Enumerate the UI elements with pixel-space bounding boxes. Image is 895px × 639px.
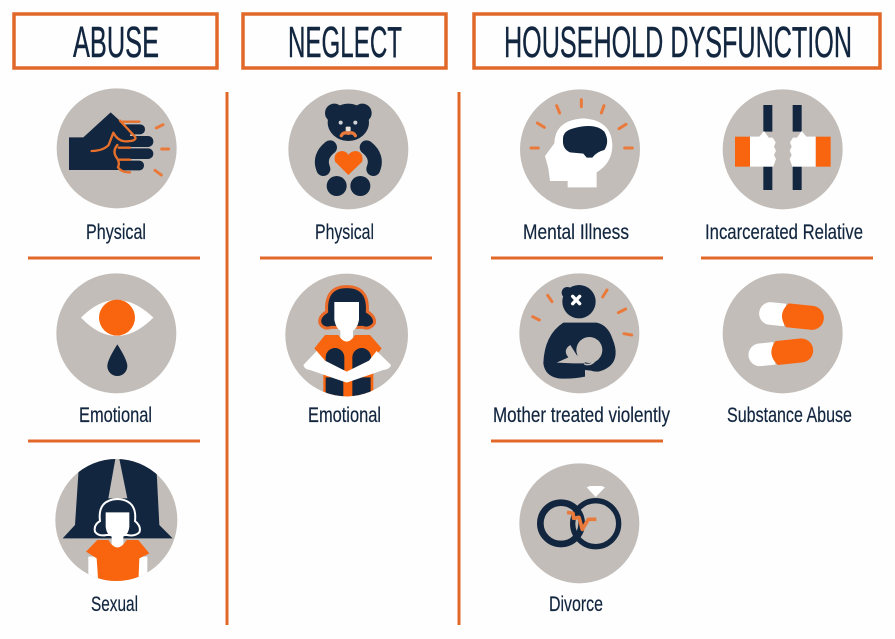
label: mental illness: Mental Illness <box>523 221 629 244</box>
icon: head with brain <box>520 89 640 209</box>
label: divorce: Divorce <box>549 593 603 616</box>
heading: abuse: ABUSE <box>73 18 159 67</box>
label: mother treated violently: Mother treated violently <box>493 404 670 427</box>
label: sexual abuse: Sexual <box>91 593 138 616</box>
icon: crying eye <box>56 273 176 393</box>
panel: neglect <box>243 14 446 427</box>
panel: household dysfunction <box>474 14 880 616</box>
icon: withdrawn child <box>285 274 408 398</box>
label: substance abuse: Substance Abuse <box>727 404 852 427</box>
panel: abuse <box>14 14 217 616</box>
icon: mother holding baby <box>519 273 639 393</box>
icon: capsules <box>723 273 843 393</box>
icon: hands on prison bars <box>723 89 843 209</box>
icon: fist <box>57 88 177 208</box>
icon: teddy bear <box>288 89 408 209</box>
label: physical abuse: Physical <box>86 221 146 244</box>
icon: broken wedding rings <box>519 463 639 583</box>
heading: neglect <box>243 14 446 68</box>
label: emotional abuse: Emotional <box>79 404 152 427</box>
icon: figure with looming shadow <box>55 459 177 583</box>
heading: abuse <box>14 14 217 68</box>
label: emotional neglect: Emotional <box>308 404 381 427</box>
heading: neglect: NEGLECT <box>288 18 402 67</box>
label: physical neglect: Physical <box>315 221 374 244</box>
